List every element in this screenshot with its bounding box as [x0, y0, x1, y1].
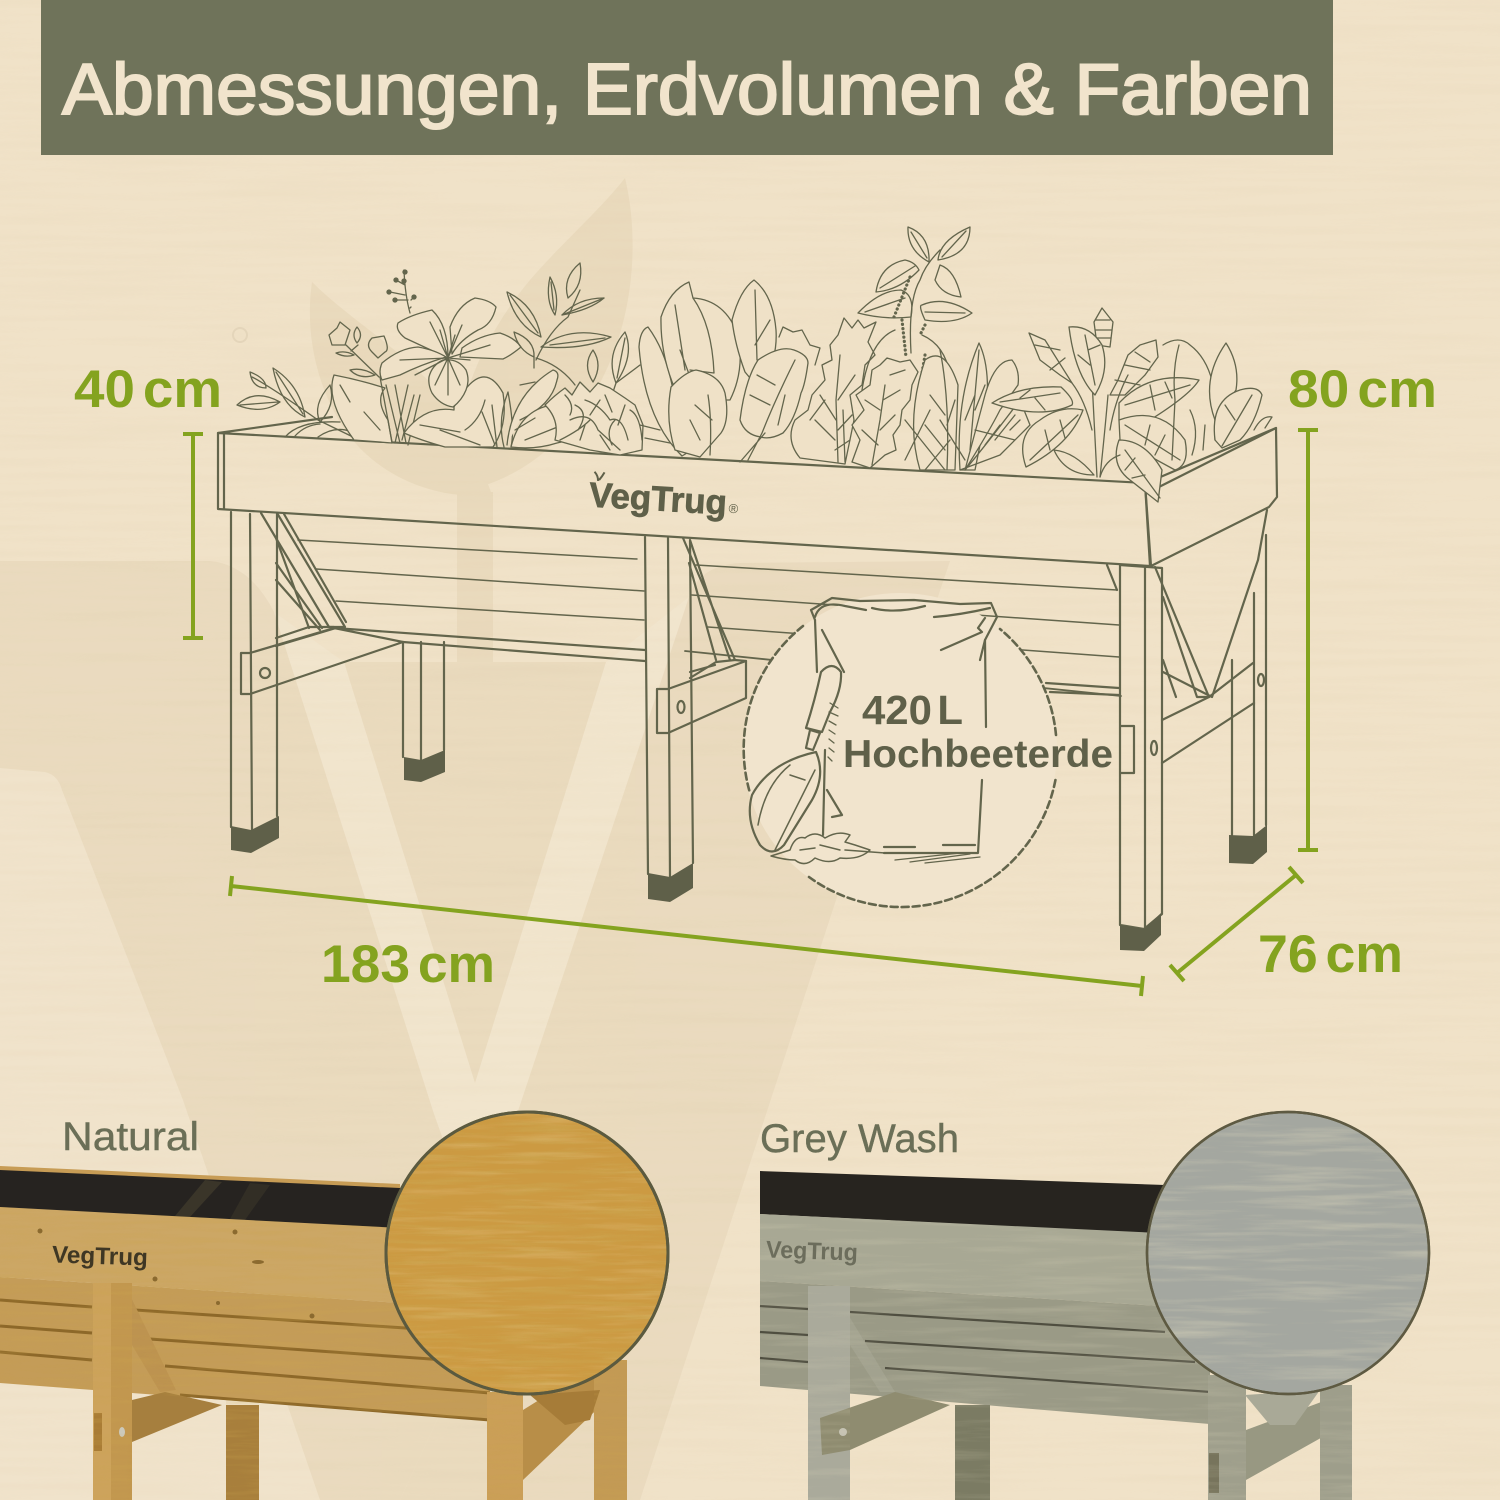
dimension: 80 cm: [1288, 360, 1437, 850]
label: Natural: Natural: [62, 1115, 199, 1159]
front feet: [231, 816, 1161, 951]
chard: [905, 343, 1030, 470]
trough body and slats: [334, 510, 1267, 697]
label: Grey Wash: Grey Wash: [760, 1117, 959, 1161]
soil callout: [743, 593, 1113, 907]
logo: VegTrug: VegTrug: [588, 476, 728, 523]
plants line art: [237, 227, 1272, 502]
planter line drawing: [218, 417, 1277, 951]
right sprig: [507, 263, 611, 385]
planter top box: [218, 417, 1277, 566]
far right spinach: [1163, 340, 1272, 460]
dimension: 183 cm: 183 cm: [321, 935, 495, 994]
knots: [38, 1228, 314, 1318]
dimension: 40 cm: 40 cm: [74, 360, 222, 419]
back-right feet and back-left foot: [404, 750, 1267, 864]
back legs: [403, 535, 1266, 836]
middle brace: [683, 538, 746, 678]
watermark: VegTrug logo: [0, 178, 950, 1500]
dashed circle: [744, 626, 1056, 907]
kale: [779, 318, 918, 468]
peony: [545, 382, 675, 455]
front legs: [231, 512, 1162, 929]
dimension: 40 cm: [74, 360, 222, 638]
spinach cluster: [639, 280, 808, 462]
dimension: 183 cm: [230, 876, 1143, 996]
bud stem: [329, 322, 387, 377]
dimension: 76 cm: 76 cm: [1258, 925, 1403, 984]
logo on natural planter: VegTrug: [52, 1241, 148, 1272]
soil volume text: Hochbeeterde: [843, 733, 1113, 776]
pepper plant: [858, 227, 972, 390]
left sprig: [237, 368, 353, 437]
callout circle background: [743, 593, 1057, 907]
logo: VegTrug: ®: [728, 501, 739, 516]
soil bag: [771, 598, 997, 864]
photo: natural planter: [0, 1166, 630, 1500]
lower leaves centre: [507, 370, 586, 448]
swatch: natural wood: [386, 1112, 668, 1394]
small leaves over peony: [588, 332, 640, 395]
soil volume text: [843, 687, 1113, 776]
dimension: 80 cm: 80 cm: [1288, 360, 1437, 419]
swatch: grey wash wood: [1147, 1112, 1429, 1394]
berry sprig: [387, 270, 416, 313]
trowel: [750, 666, 841, 852]
right brace: [1107, 565, 1264, 763]
dimension: 76 cm: [1170, 867, 1403, 984]
title: Abmessungen, Erdvolumen & Farben: [62, 50, 1312, 130]
photo: grey wash planter: [760, 1171, 1352, 1500]
title banner: [41, 0, 1333, 155]
soil volume text: 420 L: [862, 687, 963, 733]
right plant: [992, 308, 1199, 502]
slat lines: [298, 540, 1119, 657]
left brace: [261, 513, 346, 646]
logo on grey wash planter: VegTrug: [766, 1236, 858, 1267]
lily: [380, 298, 521, 447]
broad leaf and grasses: [332, 375, 420, 445]
